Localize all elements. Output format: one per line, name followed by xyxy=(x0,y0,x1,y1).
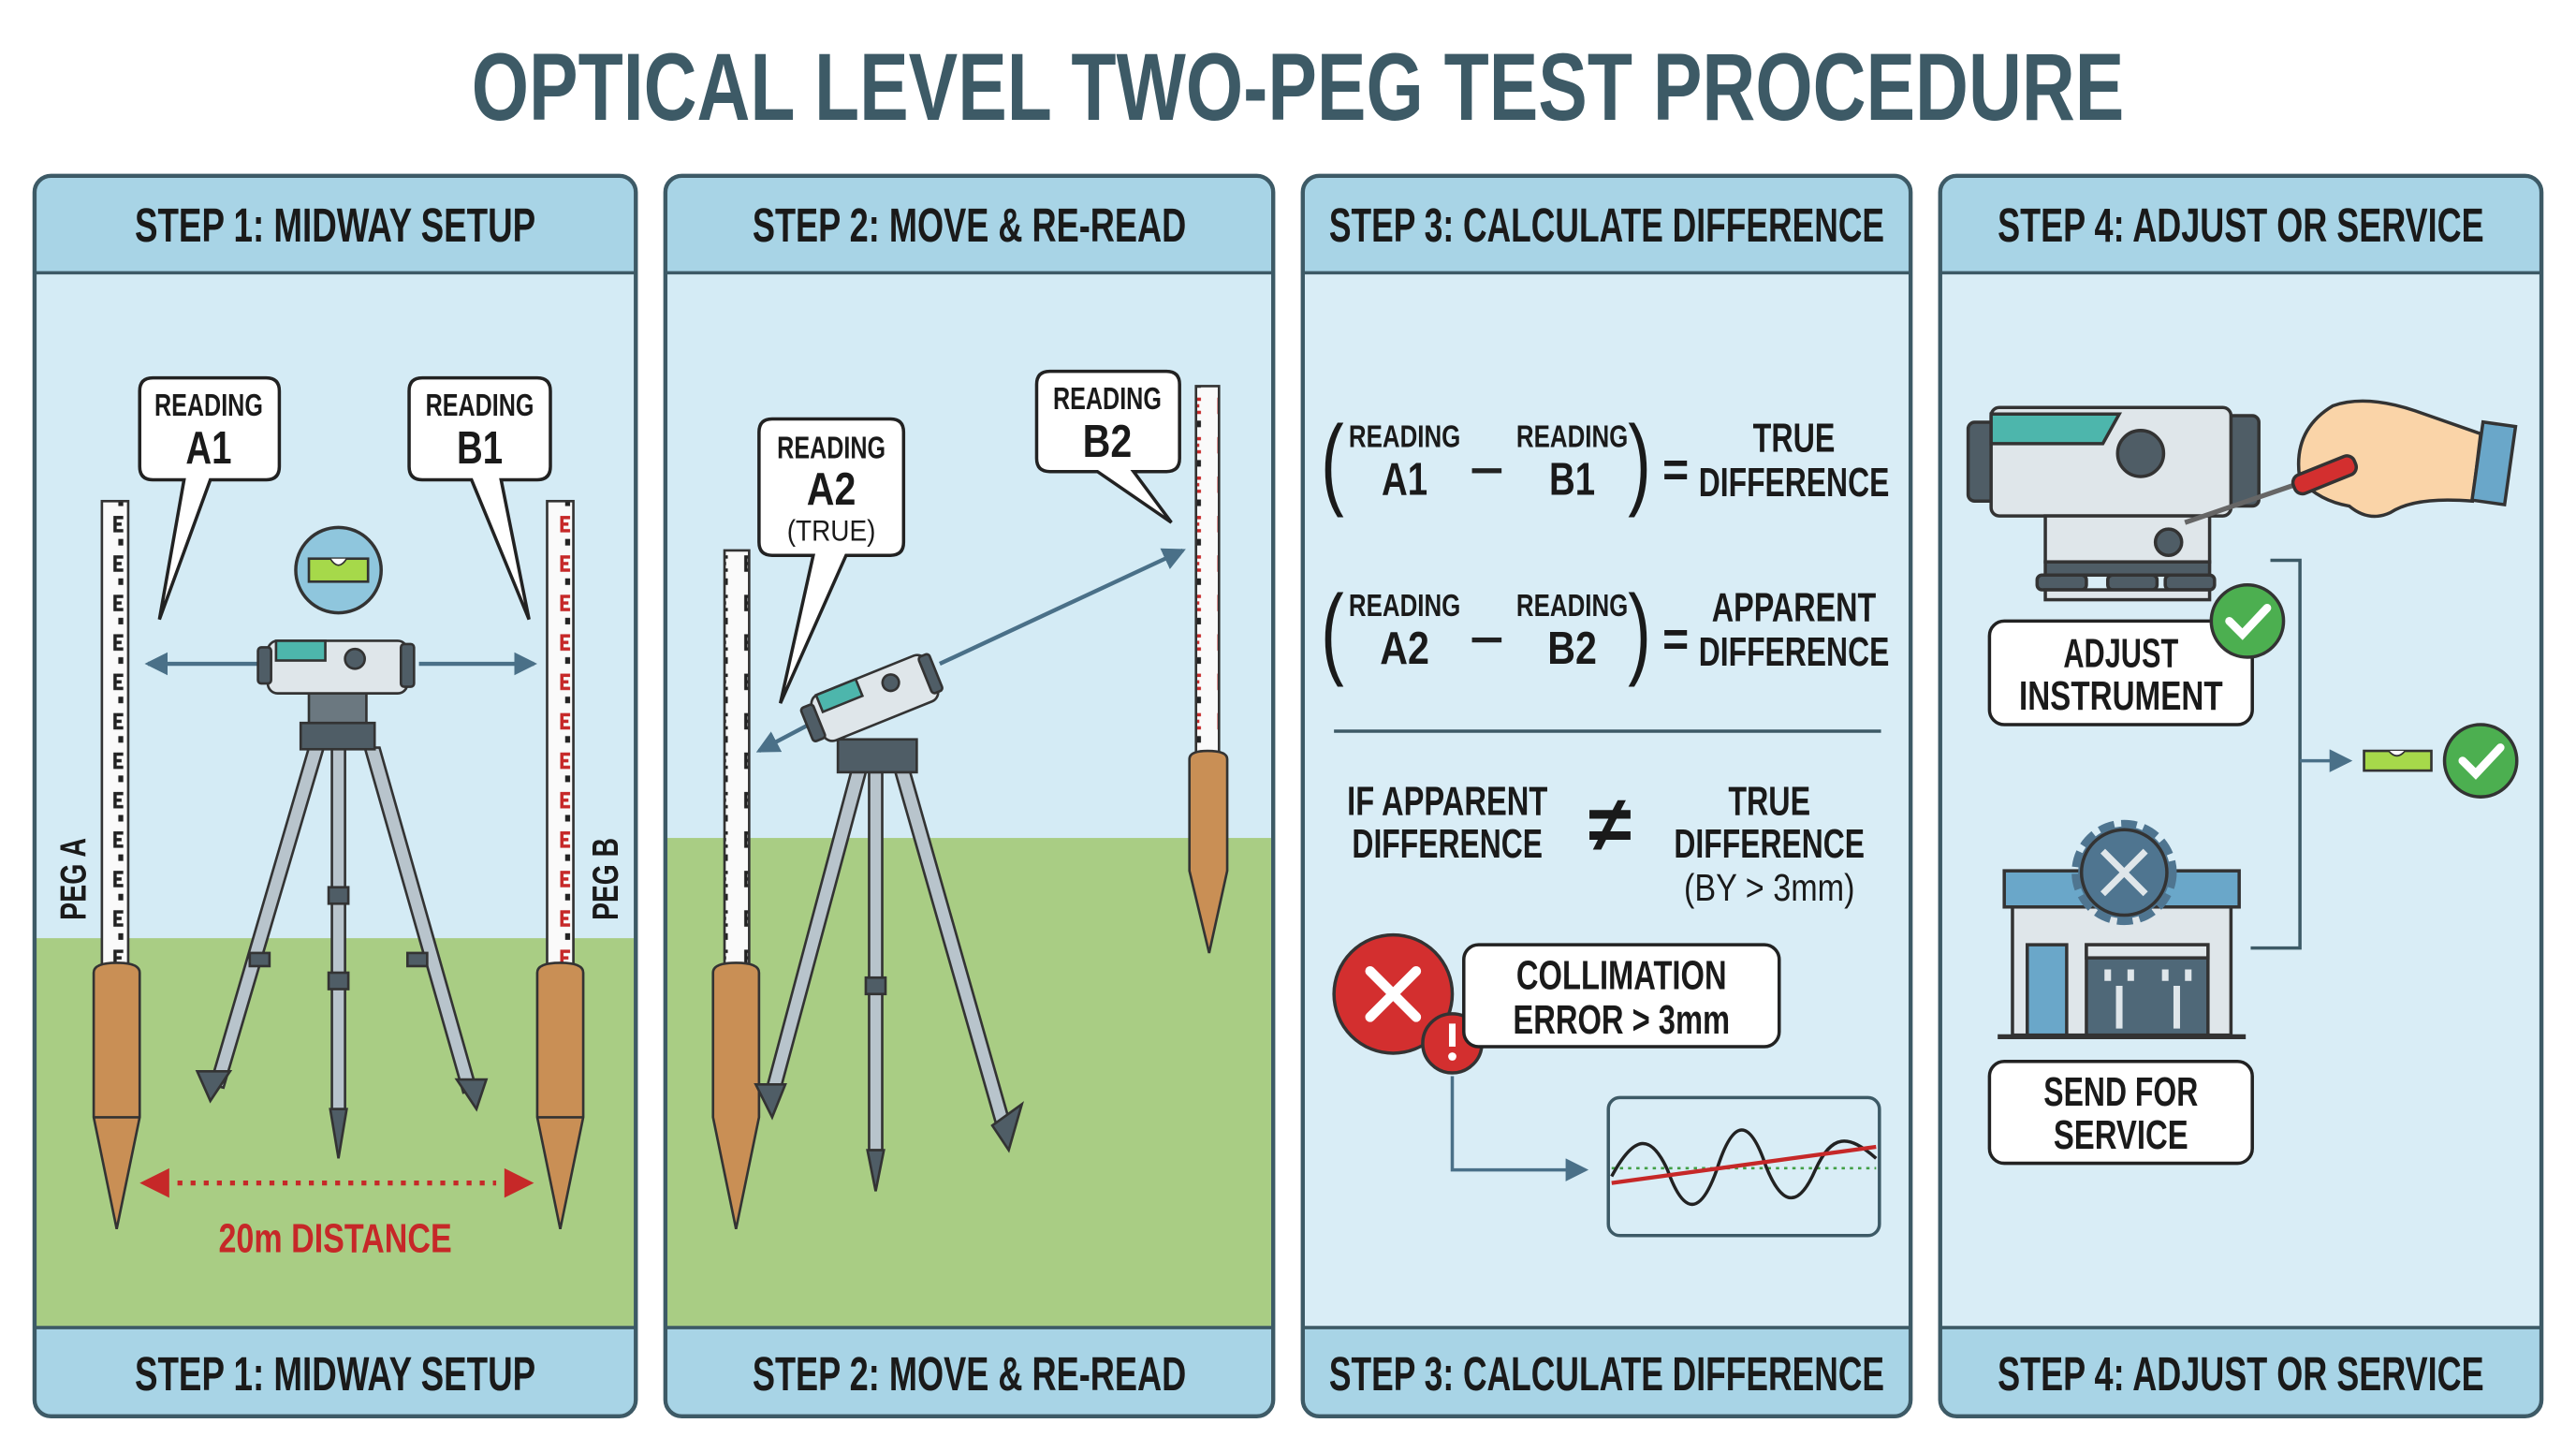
callout: reading B1 xyxy=(409,378,550,620)
icon: service building xyxy=(1998,827,2246,1036)
formula: true difference: ( xyxy=(1321,404,1344,519)
formula: true difference: A1 xyxy=(1382,454,1427,505)
panel: step 3 calculate difference xyxy=(1303,176,1910,1416)
panel: step 2 move and re-read xyxy=(666,176,1273,1416)
icon: instrument being adjusted xyxy=(1969,407,2259,600)
staff: far peg B xyxy=(1190,386,1227,953)
icon: bubble level xyxy=(296,527,381,613)
staff: near peg A xyxy=(713,550,759,1229)
callout: adjust instrument: ADJUST xyxy=(2063,631,2178,677)
formula: apparent difference: READING xyxy=(1516,589,1628,624)
formula: apparent difference: DIFFERENCE xyxy=(1699,629,1889,675)
callout: reading A2 true xyxy=(759,419,903,703)
formula: apparent difference: ) xyxy=(1628,574,1651,688)
formula: true difference: = xyxy=(1662,442,1689,497)
callout: send for service: SEND FOR xyxy=(2043,1069,2198,1115)
callout: collimation error xyxy=(1464,945,1779,1047)
condition text: (BY > 3mm) xyxy=(1684,866,1854,909)
callout: adjust instrument: INSTRUMENT xyxy=(2019,673,2223,719)
footer text: STEP 1: MIDWAY SETUP xyxy=(135,1347,535,1401)
callout: adjust instrument xyxy=(1989,621,2252,725)
header text: STEP 1: MIDWAY SETUP xyxy=(135,198,535,252)
arrow to chart xyxy=(1453,1077,1586,1170)
tripod with instrument xyxy=(198,640,487,1158)
staff: peg B xyxy=(537,501,583,1229)
panel: step 4 adjust or service xyxy=(1940,176,2541,1416)
condition text xyxy=(1347,778,1865,909)
tripod with tilted instrument xyxy=(755,651,1022,1191)
icon: check adjust xyxy=(2211,585,2284,657)
formula: true difference: READING xyxy=(1516,419,1628,454)
formula: apparent difference xyxy=(1321,574,1889,688)
formula: true difference xyxy=(1321,404,1889,519)
distance arrow xyxy=(139,1168,534,1197)
footer text: STEP 3: CALCULATE DIFFERENCE xyxy=(1329,1347,1884,1401)
callout: send for service xyxy=(1989,1062,2252,1164)
callout: reading B2: B2 xyxy=(1083,417,1132,467)
callout: reading B1: B1 xyxy=(457,423,503,474)
formula: true difference: TRUE xyxy=(1753,416,1835,462)
condition text: DIFFERENCE xyxy=(1352,821,1543,867)
formula: apparent difference: READING xyxy=(1349,589,1460,624)
callout: reading A1: A1 xyxy=(185,423,232,474)
callout: reading A2 true: (TRUE) xyxy=(787,513,875,547)
chart: error wave xyxy=(1608,1097,1880,1236)
callout: collimation error: ERROR > 3mm xyxy=(1513,997,1730,1043)
callout: reading B2 xyxy=(1036,372,1179,522)
formula: true difference: DIFFERENCE xyxy=(1699,460,1889,506)
callout: reading B1: READING xyxy=(426,389,534,423)
staff: peg A xyxy=(94,501,139,1229)
callout: reading A2 true: A2 xyxy=(807,464,856,515)
arrows: sight lines xyxy=(759,550,1183,751)
label: PEG B: PEG B xyxy=(586,838,626,920)
callout: send for service: SERVICE xyxy=(2054,1112,2188,1158)
footer text: STEP 2: MOVE & RE-READ xyxy=(753,1347,1186,1401)
callout: reading A1 xyxy=(139,378,279,620)
icon: check result xyxy=(2445,725,2517,797)
icon: error X xyxy=(1334,935,1482,1073)
formula: apparent difference: A2 xyxy=(1380,624,1429,674)
formula: true difference: READING xyxy=(1349,419,1460,454)
icon: hand with screwdriver xyxy=(2185,401,2515,522)
condition text: IF APPARENT xyxy=(1347,778,1547,824)
bracket connector arrow xyxy=(2250,560,2349,948)
arrows: sight lines xyxy=(148,663,534,665)
callout: reading B2: READING xyxy=(1053,382,1162,417)
label: PEG A: PEG A xyxy=(53,838,94,920)
callout: reading A1: READING xyxy=(154,389,263,423)
callout: reading A2 true: READING xyxy=(777,432,886,466)
formula: apparent difference: APPARENT xyxy=(1712,584,1876,630)
condition text: DIFFERENCE xyxy=(1674,821,1865,867)
condition text: TRUE xyxy=(1728,778,1810,824)
header text: STEP 2: MOVE & RE-READ xyxy=(753,198,1186,252)
formula: apparent difference: ( xyxy=(1321,574,1344,688)
formula: true difference: ) xyxy=(1628,404,1651,519)
formula: apparent difference: = xyxy=(1662,611,1689,667)
callout: collimation error: COLLIMATION xyxy=(1516,953,1727,999)
formula: true difference: B1 xyxy=(1549,454,1595,505)
label: 20m distance: 20m DISTANCE xyxy=(218,1215,452,1261)
header text: STEP 3: CALCULATE DIFFERENCE xyxy=(1329,198,1884,252)
title: OPTICAL LEVEL TWO-PEG TEST PROCEDURE xyxy=(472,34,2124,140)
icon: level vial xyxy=(2364,751,2431,770)
formula: apparent difference: B2 xyxy=(1547,624,1597,674)
panel: step 1 midway setup xyxy=(35,176,636,1416)
condition text: ≠ xyxy=(1588,780,1632,868)
